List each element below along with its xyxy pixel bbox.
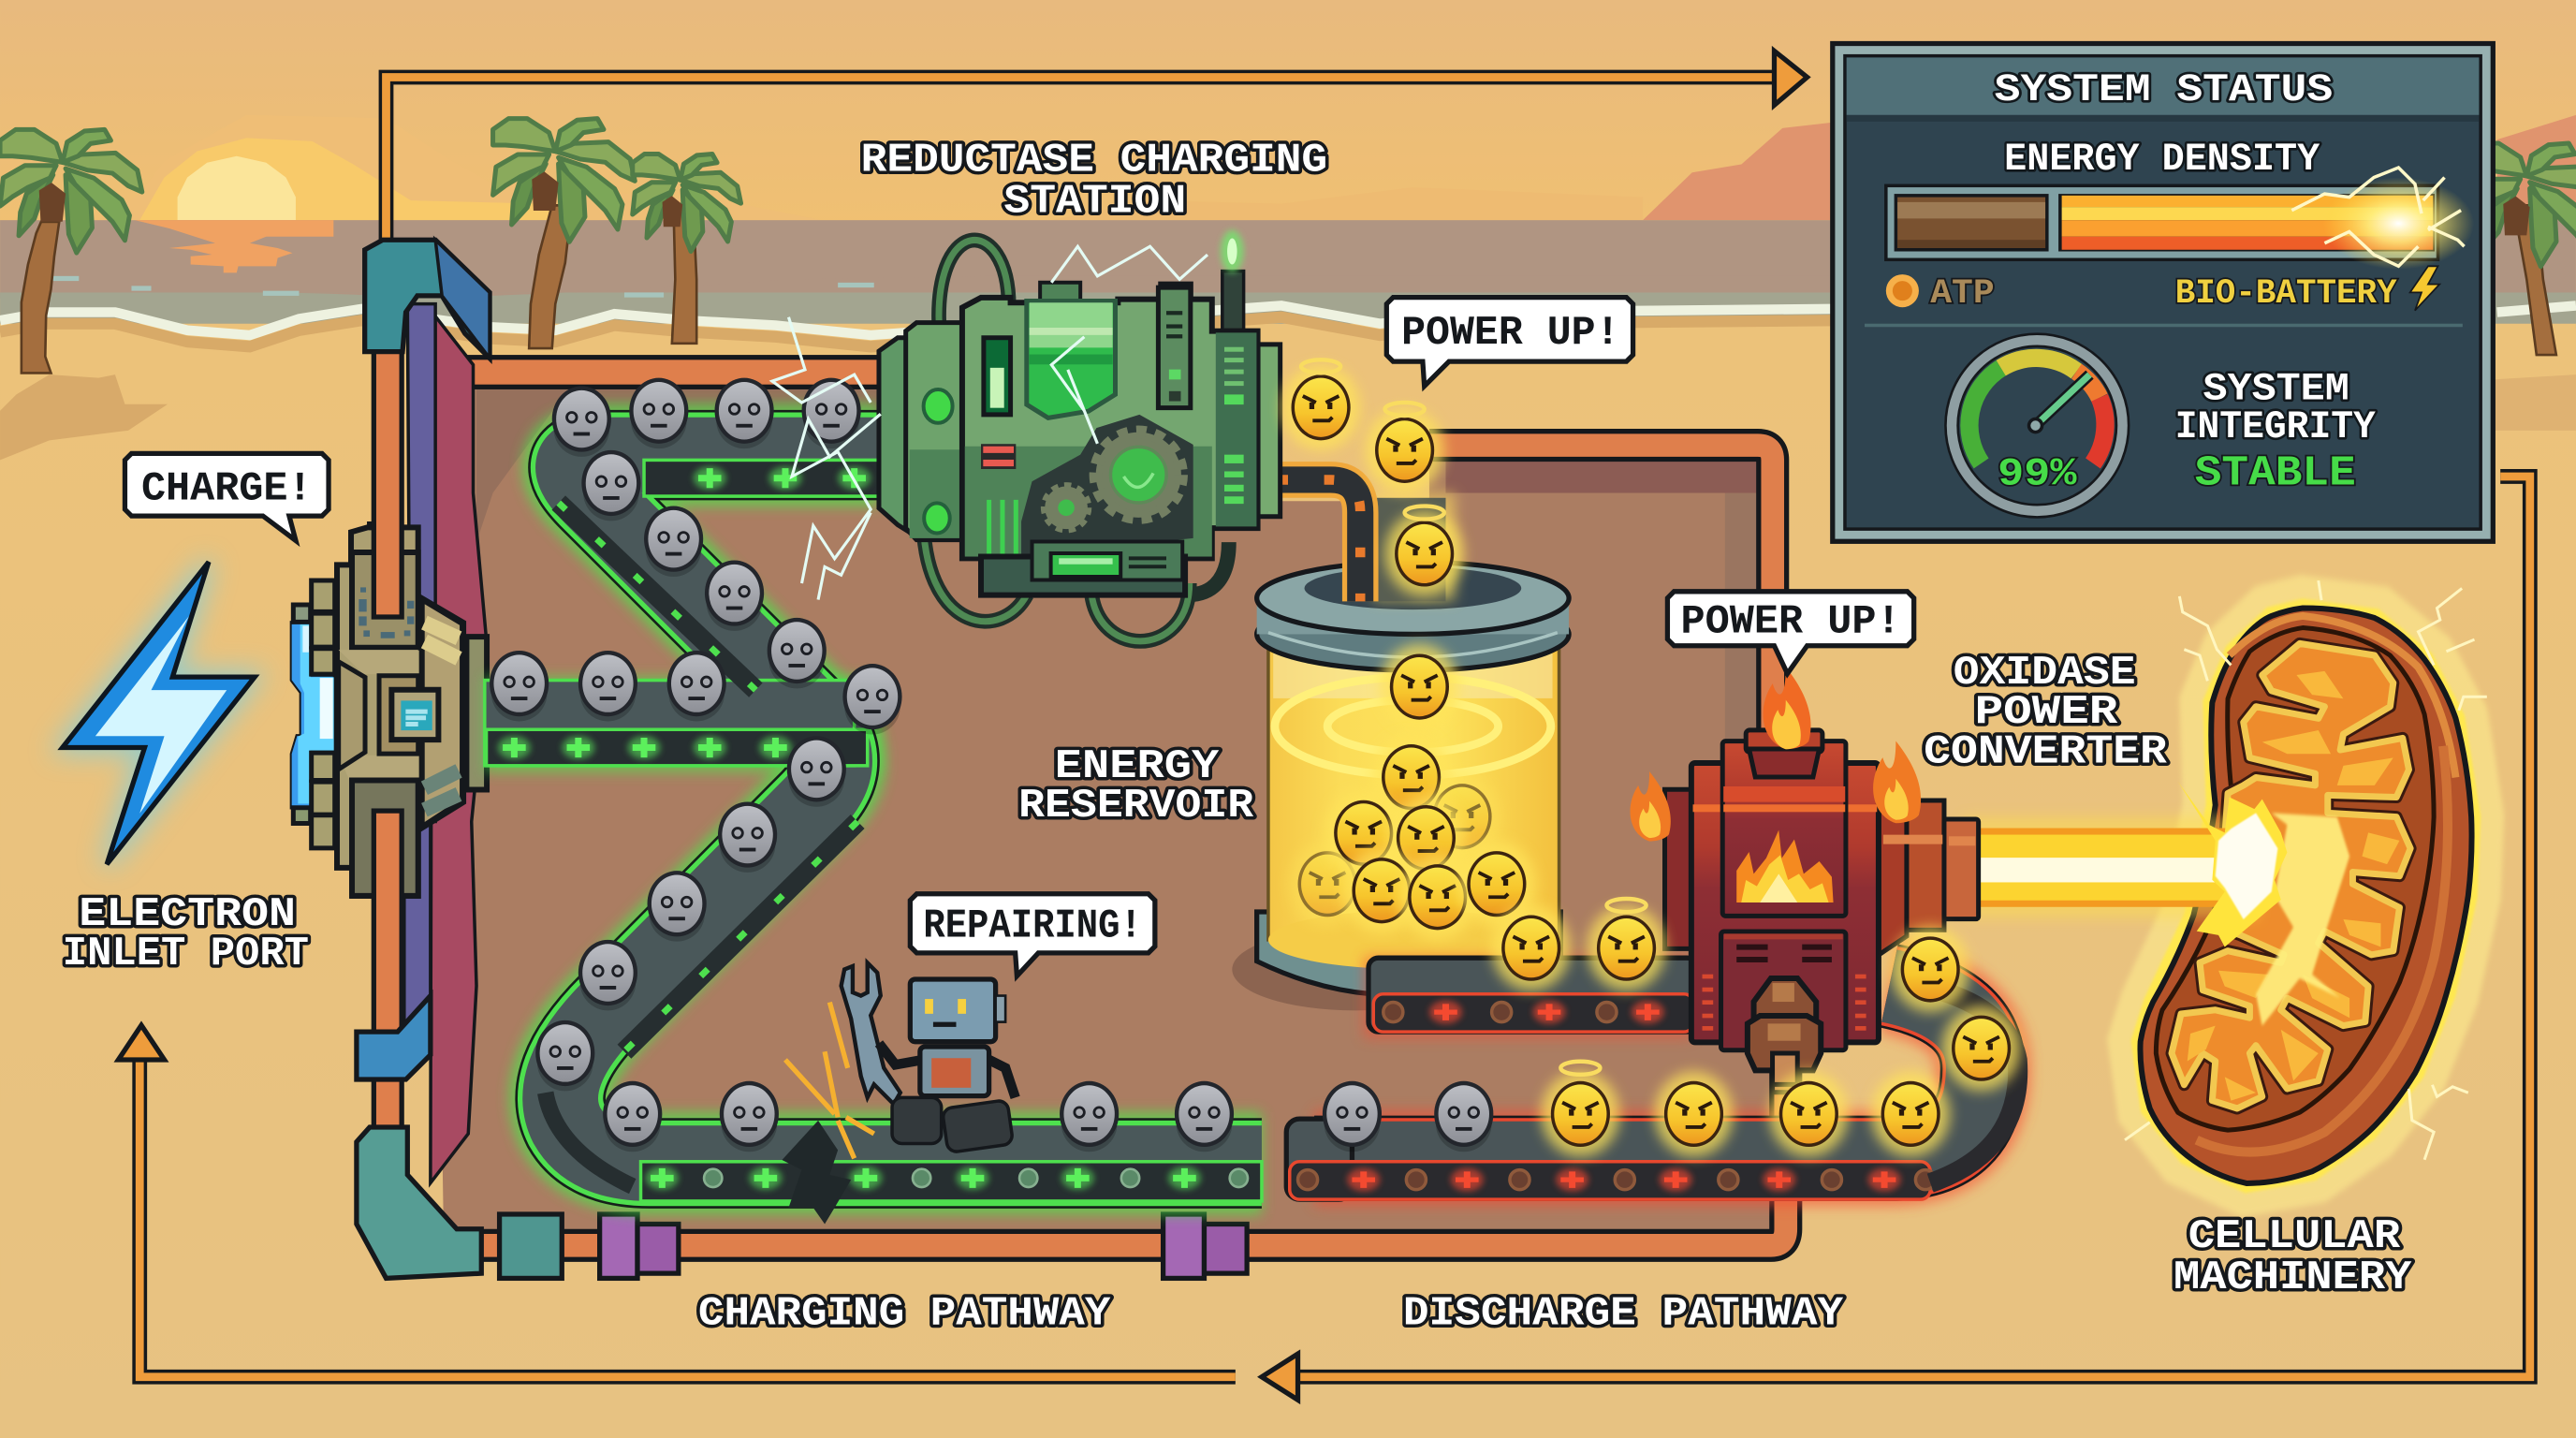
vertical bars	[989, 500, 1016, 557]
speech bubble: power up top	[1386, 298, 1633, 386]
gauge slot	[984, 338, 1011, 415]
discharge band: lower	[1290, 1162, 1935, 1199]
conveyor charges: uncharged gray balls	[490, 378, 1234, 1152]
electric sparks around charging station	[772, 246, 1208, 600]
top feedback arrow	[386, 51, 1808, 246]
port screen	[391, 690, 438, 740]
indicator lights	[924, 389, 953, 534]
mitochondrion sparks	[2125, 580, 2487, 1160]
repair sparks	[785, 1003, 874, 1158]
converter valve	[1748, 978, 1821, 1084]
palm tree center left	[493, 119, 635, 348]
machine left cap	[879, 338, 909, 532]
pipe: bottom orange	[476, 1068, 1786, 1245]
cristae folds	[2172, 643, 2410, 1108]
antenna	[1221, 230, 1244, 337]
label: oxidase power converter: POWER	[1975, 689, 2118, 736]
belt band: bottom	[641, 1162, 1262, 1201]
robot head	[910, 979, 1005, 1042]
wall: magenta strip	[431, 312, 488, 1183]
speech bubble: power up top: POWER UP!	[1401, 310, 1620, 357]
label: electron inlet port: ELECTRON	[79, 891, 296, 938]
label: reductase charging station	[861, 138, 1327, 225]
inner membrane	[2156, 628, 2434, 1130]
label: energy reservoir: RESERVOIR	[1018, 783, 1254, 829]
system integrity text	[2175, 366, 2377, 498]
system integrity text: INTEGRITY	[2175, 404, 2377, 449]
outer membrane rim	[2230, 616, 2455, 777]
port side blocks	[312, 580, 335, 848]
liquid swirl	[1275, 677, 1551, 775]
energy beam	[1963, 816, 2259, 918]
pipe: top orange	[440, 355, 884, 389]
converter top cap	[1746, 730, 1822, 777]
discharge band: upper	[1373, 994, 1693, 1032]
label: energy reservoir	[1018, 743, 1254, 829]
label: cellular machinery	[2174, 1213, 2412, 1301]
belt band: diagonals	[546, 503, 857, 1186]
energy reservoir tank	[1232, 562, 1569, 1010]
converter lower panel	[1703, 932, 1866, 1050]
left orange pipes and fittings	[357, 240, 1247, 1278]
wall: purple strip	[404, 304, 435, 1027]
setting sun	[178, 156, 296, 220]
machine cables	[923, 240, 1229, 641]
machine floor board	[431, 386, 1771, 1232]
repair robot	[785, 962, 1016, 1158]
electron inlet port	[291, 524, 487, 896]
panel title: SYSTEM STATUS	[1995, 67, 2333, 112]
label: reductase charging station: STATION	[1003, 178, 1186, 225]
label: discharge pathway: DISCHARGE PATHWAY	[1403, 1291, 1844, 1338]
label: cellular machinery: MACHINERY	[2174, 1255, 2412, 1301]
label: oxidase power converter	[1924, 650, 2168, 775]
converter side flange	[1665, 789, 1693, 948]
palm tree right	[2465, 143, 2576, 355]
purple coupling right	[1164, 1214, 1247, 1278]
return arrow to electron inlet	[118, 1025, 1236, 1377]
blue clamp	[357, 996, 431, 1079]
green glass chamber	[1027, 301, 1115, 418]
gear housing	[1021, 415, 1193, 555]
machine left section	[906, 323, 962, 540]
speech bubble: repairing	[910, 894, 1155, 976]
discharge band: curve	[1922, 986, 2018, 1183]
chute from charging station into reservoir	[1278, 479, 1456, 601]
label: electron inlet port	[63, 891, 309, 977]
palm tree center right	[633, 154, 741, 344]
label: oxidase power converter: CONVERTER	[1924, 728, 2168, 775]
ATP legend: ATP	[1930, 274, 1995, 314]
vent ribs	[1216, 332, 1256, 526]
top nubs	[1040, 283, 1080, 301]
charged golden balls	[1281, 360, 2021, 1157]
label: electron inlet port: INLET PORT	[63, 931, 309, 977]
teal elbow top	[365, 240, 490, 359]
lightning bolt energy source	[63, 562, 255, 864]
speech bubble: repairing: REPAIRING!	[923, 902, 1142, 949]
divider	[1865, 324, 2463, 327]
panel: system status	[1830, 41, 2496, 544]
system integrity gauge: 99%	[1998, 452, 2077, 497]
purple coupling left	[600, 1214, 679, 1278]
small gear	[1045, 486, 1088, 529]
cellular machinery mitochondrion	[2125, 580, 2487, 1183]
port right facet	[422, 599, 462, 827]
system integrity gauge	[1952, 340, 2123, 511]
side flames	[1630, 741, 1921, 842]
robot arms	[879, 1043, 1016, 1097]
converter main body	[1691, 763, 1879, 1042]
energy density heading: ENERGY DENSITY	[2004, 137, 2320, 182]
panel header band	[1847, 57, 2479, 122]
furnace flames	[1736, 830, 1834, 902]
blue energy core	[291, 622, 334, 808]
belt break	[782, 1121, 851, 1224]
vertical discharge tube	[1773, 1051, 1797, 1093]
speech bubble: charge	[124, 453, 329, 540]
charging pathway conveyor	[485, 455, 1262, 1224]
bottom feedback arrow to reservoir side	[1262, 477, 2530, 1400]
discharge pathway conveyor	[1286, 956, 2018, 1199]
wrench	[842, 962, 900, 1104]
blue elbow facet	[435, 240, 490, 359]
power converter: oxidase	[1630, 668, 2287, 1093]
speech bubble: power up bottom: POWER UP!	[1680, 599, 1901, 646]
machine main body	[962, 285, 1258, 558]
energy burst	[2178, 782, 2287, 946]
red stripes	[981, 444, 1016, 469]
label: cellular machinery: CELLULAR	[2188, 1213, 2401, 1260]
label: charging pathway: CHARGING PATHWAY	[698, 1291, 1111, 1338]
pipe: right orange loop	[1429, 446, 1773, 772]
label: oxidase power converter: OXIDASE	[1954, 650, 2136, 697]
port main housing	[337, 524, 463, 896]
robot body	[920, 1047, 989, 1096]
bio-battery legend: BIO-BATTERY	[2175, 274, 2398, 314]
top flame	[1764, 668, 1811, 749]
label: energy reservoir: ENERGY	[1055, 743, 1220, 790]
machine base readout	[981, 541, 1185, 595]
pipe network	[404, 304, 1786, 1245]
belt band: top	[644, 460, 879, 496]
reductase charging station machine	[879, 230, 1281, 641]
teal elbow bottom	[357, 1127, 481, 1278]
outer membrane	[2140, 609, 2472, 1183]
system integrity text: STABLE	[2195, 449, 2356, 498]
system integrity text: SYSTEM	[2203, 366, 2349, 411]
palm tree left	[0, 129, 142, 373]
ATP legend	[1886, 274, 1995, 314]
robot treads	[892, 1097, 1013, 1152]
teal coupling	[500, 1214, 562, 1278]
speech bubble: power up bottom	[1667, 592, 1914, 674]
speech bubble: charge: CHARGE!	[141, 466, 313, 513]
energy density bar	[1884, 168, 2474, 270]
label: reductase charging station: REDUCTASE CHARGING	[861, 138, 1327, 184]
machine right end	[1258, 345, 1281, 517]
belt band: middle	[487, 729, 868, 766]
reservoir lid	[1257, 562, 1569, 670]
converter nozzle	[1879, 785, 1979, 955]
large gear	[1096, 433, 1181, 518]
top vent column	[1158, 287, 1191, 408]
matrix highlights	[2188, 671, 2399, 1101]
